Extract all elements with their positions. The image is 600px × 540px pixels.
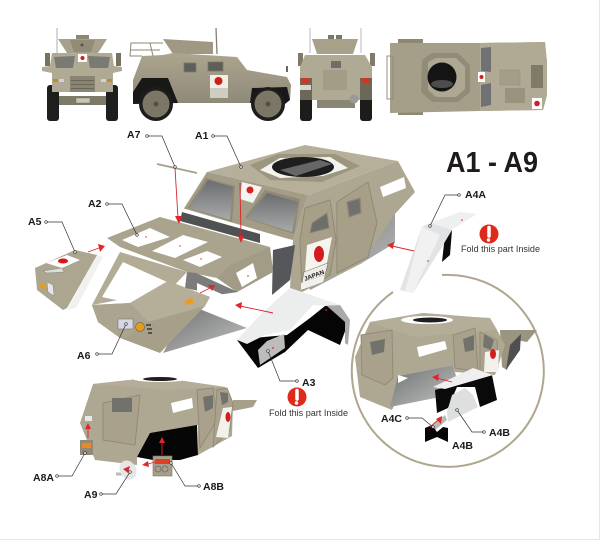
arrow: A8A (85, 423, 91, 438)
note: fold inside 2: Fold this part Inside (269, 408, 348, 418)
part A2: hood panel (107, 217, 273, 295)
arrow: A8B side (142, 461, 155, 467)
label: A7 (127, 129, 176, 168)
top view of vehicle (387, 39, 547, 115)
part A6: lower front hull (92, 252, 253, 353)
label: A1: A1 (195, 130, 209, 142)
arrow: A6 (200, 285, 215, 293)
arrow: A4A (387, 242, 414, 251)
arrow: A8B (159, 437, 165, 455)
label: A6: A6 (77, 350, 91, 362)
label: A4A (429, 189, 486, 227)
icon: alert 1 (480, 224, 498, 244)
label: A8B (170, 462, 224, 493)
arrow: A4C (430, 416, 442, 427)
part A7: antenna (157, 164, 197, 173)
label: A9: A9 (84, 489, 98, 501)
front view of vehicle (42, 28, 122, 121)
label: A3 (267, 350, 316, 389)
label: A3: A3 (302, 377, 316, 389)
label: A5: A5 (28, 216, 42, 228)
label: A8A (33, 452, 86, 484)
arrow: A3 (235, 302, 273, 313)
part A5: nose panel (35, 250, 103, 310)
detail view: vehicle with fender parts (355, 313, 537, 442)
icon: alert 2 (288, 388, 306, 406)
arrow: A9 (123, 466, 130, 473)
arrow: A7 (175, 168, 182, 224)
label: A4B right (456, 409, 510, 439)
label: A5 (28, 216, 76, 253)
part A1: main body (180, 145, 415, 295)
label: A4C: A4C (381, 413, 402, 425)
note: fold inside: Fold this part Inside (461, 244, 540, 254)
part A4A: fender flap (400, 212, 477, 293)
label: A4B right: A4B (489, 427, 510, 439)
bottom vehicle with A8 and A9 parts (80, 376, 257, 483)
part A3: fender (237, 288, 350, 368)
label: A2: A2 (88, 198, 102, 210)
arrow: A5 (88, 244, 105, 252)
label: A8B: A8B (203, 481, 224, 493)
label: A4B bottom: A4B (452, 440, 473, 452)
arrow: detail fender (432, 374, 452, 382)
label: A4A: A4A (465, 189, 486, 201)
label: A4C (381, 413, 434, 428)
rear view of vehicle (298, 28, 375, 121)
detail circle (352, 275, 544, 467)
side view of vehicle (130, 28, 291, 121)
title: A1 - A9 (446, 147, 538, 179)
label: A8A: A8A (33, 472, 54, 484)
label: A6 (77, 323, 127, 362)
label: A2 (88, 198, 138, 236)
label: A1 (195, 130, 242, 168)
label: A7: A7 (127, 129, 141, 141)
part A1: main body: JAPAN (304, 270, 325, 283)
arrow: A1 (238, 183, 244, 243)
label: A9 (84, 471, 131, 501)
